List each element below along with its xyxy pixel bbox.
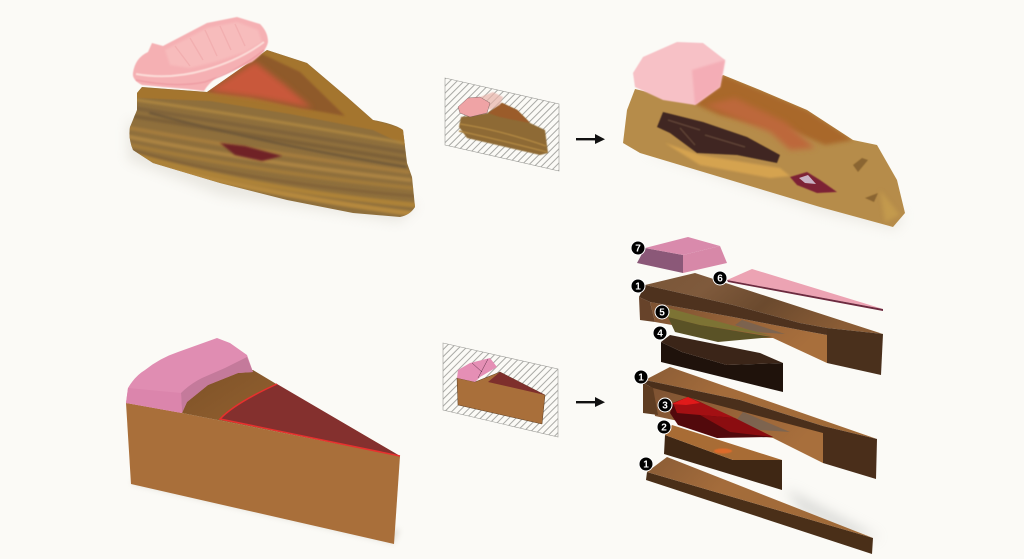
layer: top cake shell <box>639 273 883 375</box>
layer: piece 4 dark <box>661 335 783 392</box>
jam wedge <box>220 384 400 456</box>
layer: piece 2 <box>664 425 782 490</box>
layer: piece 3 red jam <box>670 397 773 438</box>
frosting block <box>633 42 725 105</box>
frosting <box>133 17 268 91</box>
photo: sliced cake cross-section <box>615 42 910 235</box>
number badges: 1 <box>638 372 644 384</box>
chocolate filling <box>657 112 780 163</box>
arrow: model to exploded view <box>576 397 605 407</box>
number badges: 4 <box>657 328 663 340</box>
top crust and jam <box>137 50 408 146</box>
soft shadow <box>785 488 880 538</box>
glazed top crust <box>693 75 853 145</box>
number badges <box>631 241 727 471</box>
number badges: 5 <box>659 308 665 318</box>
side face <box>126 403 400 544</box>
cake layer ridges <box>130 100 415 214</box>
mini cake photo <box>458 92 548 155</box>
layer: middle cake shell <box>643 367 877 479</box>
number badges: 3 <box>662 400 668 412</box>
layer: bottom base <box>646 457 873 554</box>
layer: piece 5 olive <box>668 308 772 342</box>
pink frosting <box>126 338 253 413</box>
jam pocket <box>790 172 837 193</box>
number badges: 1 <box>635 282 641 292</box>
hatched section plane: model <box>443 343 558 437</box>
layer: piece 7 pink block <box>637 237 727 273</box>
jam in side gap <box>220 143 282 161</box>
photo: whole cake slice <box>120 17 420 225</box>
number badges: 2 <box>661 422 667 434</box>
layer: piece 6 pink strip <box>727 269 883 311</box>
hatched section plane: photo <box>445 78 559 171</box>
number badges: 7 <box>635 244 641 254</box>
arrow: photo to cross-section <box>576 134 605 144</box>
pale filling band <box>665 143 790 178</box>
exploded model <box>631 237 883 554</box>
top face <box>182 370 400 456</box>
mini model slice <box>457 358 545 424</box>
number badges: 6 <box>717 274 723 284</box>
number badges: 1 <box>643 460 649 470</box>
3D model: whole slice <box>126 338 400 544</box>
crumb gouges <box>853 158 878 202</box>
